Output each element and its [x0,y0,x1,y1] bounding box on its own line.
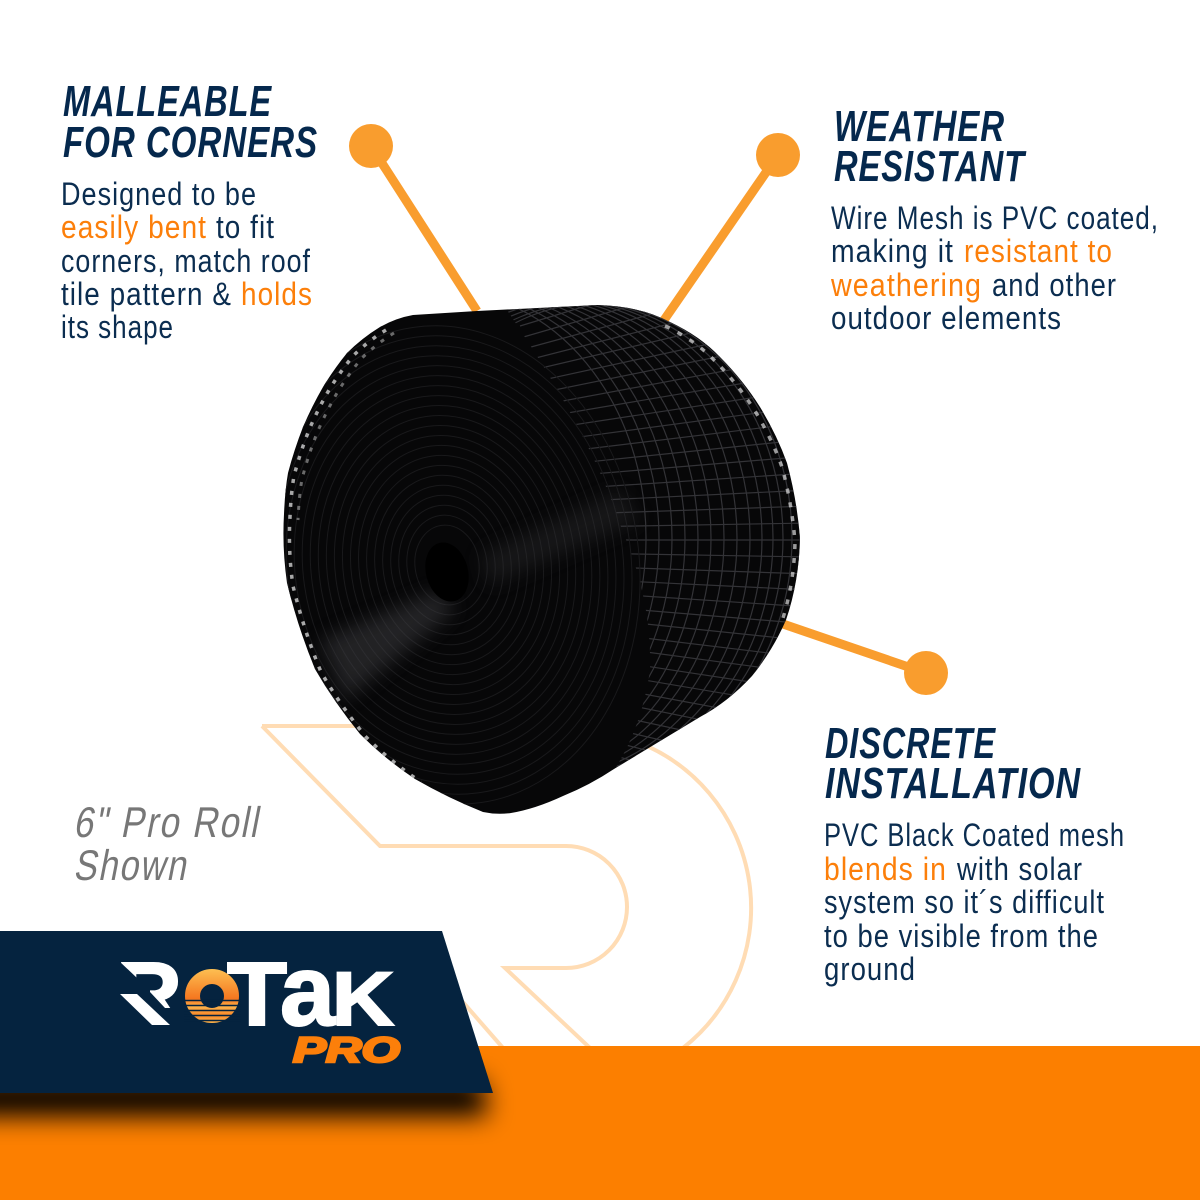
icon: sunset ring [184,976,241,1020]
roll left rim gaps [289,330,421,782]
heading: WEATHER [834,102,1005,151]
body text: blends in [824,851,947,887]
R logo cut and diagonal leg [108,955,192,1034]
roll face rings [285,325,640,804]
body text: ground [824,951,916,987]
body text: its shape [61,309,174,345]
body text: easily bent [61,209,207,245]
heading [834,102,1026,191]
wordmark: a [280,935,336,1047]
RoTak Pro logo [108,935,400,1070]
wordmark: T [227,945,287,1045]
body text: Designed to be [61,176,257,212]
wordmark [116,935,394,1047]
heading [63,77,318,167]
wire mesh roll [283,305,800,814]
body text: resistant to [964,233,1113,269]
body text: corners, match roof [61,243,311,279]
heading: RESISTANT [834,142,1026,191]
heading [825,719,1081,808]
wordmark: R [116,945,182,1045]
roll sheen [320,590,455,700]
roll hub hole [427,577,463,602]
body text: and other [992,267,1117,303]
feature: malleable for corners [61,77,318,345]
roll right rim gaps [665,326,795,624]
heading: INSTALLATION [825,759,1081,808]
heading: DISCRETE [825,719,996,768]
caption: 6 inch pro roll shown: Shown [71,842,194,890]
body text: holds [241,276,313,312]
ghost logo outline background [262,726,751,1048]
body text [830,200,1159,336]
wordmark: K [332,957,394,1042]
body text: system so it´s difficult [824,884,1105,920]
roll side grid [508,305,800,767]
navy logo banner [0,931,493,1093]
body text [824,817,1125,987]
callout line and dot: discrete [783,624,948,695]
feature: discrete installation [824,719,1125,987]
callout line and dot: weather [662,133,800,323]
body text: to be visible from the [824,918,1099,954]
body text [61,176,313,345]
body text: making it [831,233,954,269]
body text: with solar [956,851,1083,887]
body text: to fit [216,209,275,245]
callout line and dot: malleable [349,124,477,311]
orange footer band [0,1046,1200,1200]
body text: weathering [830,267,982,303]
caption: 6 inch pro roll shown: 6" Pro Roll [71,799,266,847]
body text: tile pattern & [61,276,232,312]
feature: weather resistant [830,102,1159,336]
banner shadow [0,1080,488,1116]
body text: PVC Black Coated mesh [824,817,1125,853]
PRO mark: PRO [293,1031,400,1070]
heading: FOR CORNERS [63,118,318,167]
heading: MALLEABLE [63,77,272,126]
body text: outdoor elements [831,300,1062,336]
caption: 6 inch pro roll shown [71,799,266,890]
